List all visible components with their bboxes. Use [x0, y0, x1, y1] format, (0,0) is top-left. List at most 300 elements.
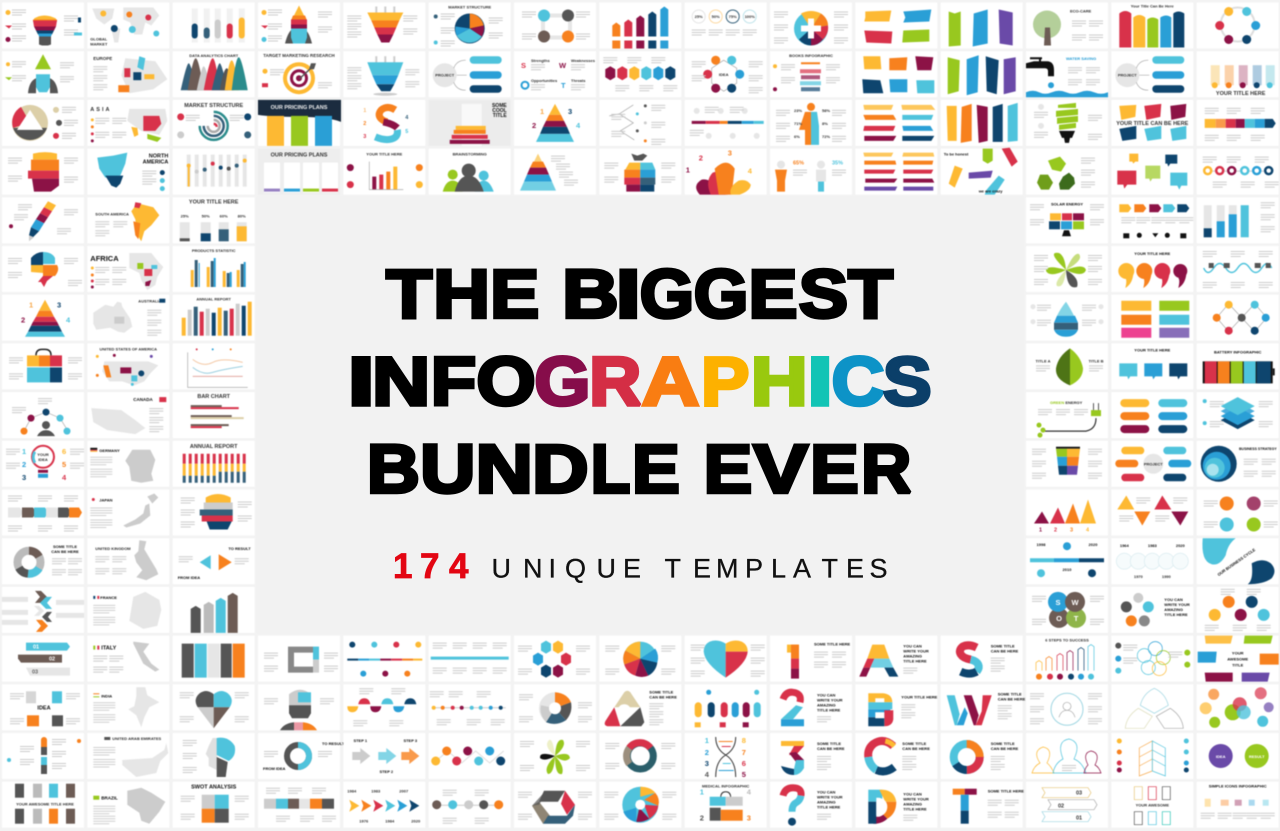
thumbnail: market structure pie	[429, 2, 511, 48]
thumbnail: letter C: CAN BE HERE	[902, 746, 930, 751]
thumbnail: people percentages: 35%	[832, 161, 843, 167]
thumbnail: battery infographic: BATTERY INFOGRAPHIC	[1214, 349, 1262, 354]
thumbnail: triangle arrow timeline: 1976	[359, 819, 369, 824]
thumbnail: cycle donut	[2, 538, 84, 584]
thumbnail: circular ring	[770, 2, 852, 48]
thumbnail: dollar sign: 4	[405, 115, 409, 121]
thumbnail: dollar sign	[343, 100, 425, 146]
thumbnail: gender split figure: 8%	[822, 121, 828, 126]
thumbnail: success bubbles	[1197, 684, 1279, 730]
thumbnail: donut from idea to result: TO RESULT	[322, 741, 345, 746]
thumbnail: gender split figure: 71%	[794, 121, 802, 126]
thumbnail: question mark: WRITE YOUR	[817, 795, 843, 800]
thumbnail: DNA helix: 1	[705, 736, 709, 745]
title: the biggest infographics bundle ever: E	[704, 430, 752, 508]
title: the biggest infographics bundle ever: T	[386, 256, 432, 332]
thumbnail: Brazil map: BRAZIL	[101, 796, 118, 801]
thumbnail: snake wave	[1197, 246, 1279, 292]
thumbnail: SWOT overlapping: O	[1056, 614, 1062, 623]
thumbnail: India map	[87, 684, 169, 730]
thumbnail: your idea bulb: 5	[62, 460, 66, 469]
thumbnail: global market map: GLOBAL	[90, 36, 108, 42]
thumbnail: pictogram columns: 80%	[238, 213, 246, 218]
thumbnail: letter O	[941, 733, 1023, 779]
thumbnail: gender split figure: 6%	[794, 134, 800, 139]
thumbnail: triangle peaks: 1	[1039, 528, 1042, 534]
thumbnail: medical infographic: MEDICAL INFOGRAPHIC	[702, 784, 749, 789]
thumbnail: five brushes	[941, 100, 1023, 146]
title: the biggest infographics bundle ever: G	[534, 343, 590, 420]
title: the biggest infographics bundle ever: E	[748, 256, 798, 332]
thumbnail: pictogram columns: 60%	[220, 213, 228, 218]
thumbnail: question mark: TITLE HERE	[817, 805, 841, 810]
thumbnail: puzzle square	[258, 636, 340, 682]
thumbnail: idea result blobs: IDEA	[1216, 754, 1226, 759]
thumbnail: letter T	[941, 782, 1024, 828]
thumbnail: SWOT circles	[514, 2, 596, 48]
title: the biggest infographics bundle ever: E	[632, 430, 680, 508]
thumbnail: cycle donut: CAN BE HERE	[51, 549, 79, 554]
thumbnail: business cycle: OUR BUSINESS CYCLE	[1216, 547, 1257, 577]
thumbnail: global market map	[87, 2, 169, 48]
title: the biggest infographics bundle ever: N	[476, 430, 533, 508]
thumbnail: puzzle heart	[173, 684, 255, 730]
thumbnail: triangle arrow timeline: 2020	[411, 819, 421, 824]
thumbnail: numeral 3	[770, 733, 852, 779]
thumbnail: outline ribbons: 01	[1076, 816, 1082, 822]
title: the biggest infographics bundle ever: R	[589, 343, 641, 420]
thumbnail: United Arab Emirates map: UNITED ARAB EMIRATES	[112, 736, 162, 741]
thumbnail: swot words: T	[561, 81, 566, 90]
thumbnail: triangle peaks: 3	[1070, 528, 1073, 534]
thumbnail: letter B	[855, 684, 938, 730]
thumbnail: rounded triangle	[599, 684, 681, 730]
thumbnail: tree: ECO-CARE	[1070, 8, 1092, 14]
thumbnail: people percentages	[770, 149, 852, 195]
thumbnail: France map: FRANCE	[100, 595, 117, 600]
thumbnail: ribbon list	[2, 636, 84, 682]
thumbnail: pricing plans light	[258, 149, 340, 195]
thumbnail: numbered pyramid: 2	[532, 121, 536, 130]
thumbnail: pictogram columns: 25%	[181, 213, 189, 218]
thumbnail: gender split figure: 58%	[822, 108, 830, 113]
thumbnail: Asia map: ASIA	[90, 107, 111, 113]
thumbnail: brainstorming: BRAINSTORMING	[453, 152, 487, 157]
thumbnail: simple icons infographic: SIMPLE ICONS INFOGRAPHIC	[1209, 784, 1267, 789]
thumbnail: your idea bulb: IDEA	[38, 457, 48, 462]
thumbnail: growth bars	[343, 149, 425, 195]
thumbnail: ribbons five	[855, 149, 937, 195]
thumbnail: DNA helix: 4	[705, 770, 710, 779]
thumbnail: question mark: YOU CAN	[817, 790, 836, 795]
thumbnail: medical infographic: 4	[747, 788, 752, 797]
thumbnail: dollar sign: 5	[405, 129, 408, 135]
thumbnail: Australia map: AUSTRALIA	[138, 299, 162, 304]
thumbnail: market structure radial	[173, 100, 255, 146]
thumbnail: outline ribbons: 03	[1076, 791, 1082, 797]
thumbnail: target marketing research: TARGET MARKETING RESEARCH	[263, 53, 335, 58]
thumbnail: your idea bulb	[2, 441, 84, 487]
thumbnail: awesome title tags	[2, 782, 84, 828]
thumbnail: United Kingdom map: UNITED KINGDOM	[95, 546, 131, 551]
thumbnail: years timeline: 1998	[1037, 542, 1046, 547]
thumbnail: zigzag circles	[429, 733, 511, 779]
thumbnail: hexagon ring with center text	[685, 51, 767, 97]
thumbnail: simple icons infographic	[1197, 782, 1279, 828]
title: the biggest infographics bundle ever: S	[883, 343, 932, 420]
thumbnail: pentagon blobs: YOU CAN	[1164, 597, 1183, 602]
thumbnail: step arrows: STEP 2	[379, 769, 394, 774]
thumbnail: letter O: SOME TITLE	[991, 741, 1015, 746]
thumbnail: to be honest brushes: we are crazy	[978, 189, 1003, 194]
thumbnail: brainstorming	[429, 149, 511, 195]
thumbnail: pill capsules	[685, 684, 767, 730]
thumbnail: Japan map: JAPAN	[99, 498, 113, 502]
title: the biggest infographics bundle ever: I	[616, 256, 641, 332]
thumbnail: hexagon ring with center text: IDEA	[719, 72, 729, 77]
title: the biggest infographics bundle ever: O	[476, 343, 536, 420]
thumbnail: pricing plans dark	[258, 100, 341, 146]
thumbnail: swot words: S	[521, 61, 526, 70]
thumbnail: tree	[1026, 2, 1108, 48]
thumbnail: donut from idea to result	[258, 733, 345, 779]
thumbnail: letter D: AMAZING	[903, 802, 922, 807]
thumbnail: years timeline: 2010	[1063, 567, 1072, 572]
thumbnail: step arrows	[343, 733, 425, 779]
thumbnail: energy bulb	[1026, 100, 1108, 146]
thumbnail: zigzag four	[1197, 587, 1279, 633]
thumbnail: swot words: Strengths	[531, 58, 550, 63]
thumbnail: outline ribbons: 02	[1058, 804, 1064, 810]
thumbnail: some cool title stairs	[429, 100, 511, 146]
thumbnail: your idea bulb: 4	[62, 473, 67, 482]
thumbnail: stacked layers	[1197, 392, 1279, 438]
thumbnail: Canada map: CANADA	[133, 397, 154, 402]
title: the biggest infographics bundle ever: G	[694, 256, 748, 332]
thumbnail: triangle peaks	[1026, 490, 1108, 536]
thumbnail: brush swatches six	[855, 51, 937, 97]
thumbnail: line chart	[173, 343, 255, 389]
thumbnail: SWOT overlapping	[1026, 587, 1108, 633]
thumbnail: Japan map	[87, 490, 169, 536]
thumbnail: numeral 3: CAN BE HERE	[817, 746, 845, 751]
thumbnail: triangle arrow timeline: 1984	[385, 819, 395, 824]
thumbnail: United States map	[87, 343, 169, 389]
thumbnail: products statistic bars: PRODUCTS STATISTIC	[192, 248, 236, 253]
thumbnail: swot words: Opportunities	[531, 78, 558, 83]
thumbnail: arrow chevrons	[2, 587, 84, 633]
title: the biggest infographics bundle ever: R	[861, 430, 911, 508]
thumbnail: gender split figure: 23%	[794, 108, 802, 113]
thumbnail: idea arrows	[2, 684, 84, 730]
thumbnail: trash recycling bin	[1026, 441, 1108, 487]
thumbnail: some cool title stairs: TITLE	[493, 113, 507, 119]
thumbnail: your idea bulb: 6	[62, 447, 66, 456]
title: the biggest infographics bundle ever: C	[832, 343, 884, 420]
thumbnail: outline tags	[1111, 782, 1193, 828]
thumbnail: project hub capsules	[1111, 441, 1193, 487]
thumbnail: water saving: WATER SAVING	[1066, 56, 1096, 61]
thumbnail: solar energy	[1026, 197, 1108, 243]
title: the biggest infographics bundle ever: G	[640, 256, 694, 332]
thumbnail: recycle arrows	[1026, 149, 1108, 195]
thumbnail: DNA helix: 8	[742, 736, 746, 745]
thumbnail: percentage rings: 50%	[712, 14, 720, 19]
thumbnail: arrows idea to result: TO RESULT	[228, 546, 251, 551]
thumbnail: brush boxes	[855, 2, 937, 48]
thumbnail: speech bubbles	[1111, 149, 1193, 195]
thumbnail: numbered pyramid two	[2, 295, 84, 341]
thumbnail: swot words: W	[559, 61, 567, 70]
thumbnail: ribbon brushes	[855, 100, 937, 146]
thumbnail: outline triangle	[1111, 684, 1193, 730]
thumbnail: books infographic: BOOKS INFOGRAPHIC	[789, 53, 833, 58]
thumbnail: pricing plans dark: OUR PRICING PLANS	[271, 105, 328, 111]
thumbnail: Africa map	[87, 246, 169, 292]
thumbnail: briefcase	[2, 343, 84, 389]
thumbnail: letter T: SOME TITLE HERE	[988, 789, 1024, 794]
thumbnail: head silhouette	[2, 149, 84, 195]
thumbnail: outline ring person	[1026, 684, 1108, 730]
subtitle: 174 unique templates: 174	[393, 547, 469, 586]
thumbnail: DNA helix	[685, 733, 767, 779]
thumbnail: idea arrows: IDEA	[37, 705, 51, 711]
thumbnail: project tabs repeat	[1111, 51, 1193, 97]
thumbnail: letter W: CAN BE HERE	[998, 696, 1026, 701]
thumbnail: capsule pairs	[1111, 392, 1193, 438]
thumbnail: profile head puzzle	[258, 684, 340, 730]
thumbnail: your idea bulb: 3	[22, 473, 26, 482]
thumbnail: pictogram columns	[173, 197, 255, 243]
thumbnail: outline people	[1026, 733, 1108, 779]
thumbnail: percentage rings: 75%	[729, 14, 737, 19]
thumbnail: idea result blobs	[1197, 733, 1279, 779]
thumbnail: awesome title tags: YOUR AWESOME TITLE HERE	[16, 802, 74, 807]
thumbnail: market structure radial: MARKET STRUCTURE	[184, 103, 244, 109]
thumbnail: medical infographic: 1	[700, 788, 704, 797]
thumbnail: letter A	[855, 636, 937, 682]
thumbnail: Europe map: EUROPE	[93, 56, 112, 61]
thumbnail: triangle arrow timeline	[343, 782, 425, 828]
thumbnail: petal fan: 2	[699, 154, 703, 163]
thumbnail: numbered pyramid: 4	[576, 121, 581, 130]
thumbnail: title between bubbles	[1111, 100, 1193, 146]
thumbnail: leaf: TITLE A	[1036, 358, 1051, 363]
thumbnail: gradient heart	[685, 636, 767, 682]
thumbnail: ribbon list: 03	[32, 670, 38, 676]
thumbnail: money bag	[599, 149, 681, 195]
thumbnail: step arrows: STEP 1	[353, 738, 368, 743]
title: the biggest infographics bundle ever: U	[420, 430, 476, 508]
title: the biggest infographics bundle ever: H	[751, 343, 808, 420]
thumbnail: DNA helix: 5	[742, 770, 746, 779]
thumbnail: petal fan: 1	[686, 166, 690, 175]
thumbnail: overlap circles timeline: 1970	[1134, 574, 1144, 579]
subtitle: 174 unique templates: UNIQUE TEMPLATES	[492, 554, 888, 584]
title: the biggest infographics bundle ever: V	[753, 430, 808, 508]
thumbnail: percentage rings: 25%	[695, 14, 703, 19]
title: the biggest infographics bundle ever: I	[807, 343, 833, 420]
thumbnail: numeral 2: TITLE HERE	[817, 707, 841, 712]
thumbnail: Africa map: AFRICA	[90, 254, 119, 263]
thumbnail: pentagon blobs: WRITE YOUR	[1164, 602, 1190, 607]
thumbnail: North America map	[87, 149, 169, 195]
thumbnail: horizontal bar chart: BAR CHART	[197, 394, 231, 400]
thumbnail: business cycle	[1197, 538, 1279, 584]
thumbnail: brush buttons	[1111, 295, 1193, 341]
thumbnail: DNA helix: 7	[742, 748, 746, 757]
thumbnail: donut from idea to result: FROM IDEA	[263, 766, 286, 771]
thumbnail: swirl circle	[599, 782, 681, 828]
thumbnail: cycle donut: SOME TITLE	[53, 544, 77, 549]
thumbnail: data analytics chart: DATA ANALYTICS CHART	[189, 53, 239, 58]
thumbnail: letter S	[941, 636, 1023, 682]
thumbnail: petal fan: 3	[728, 149, 732, 158]
thumbnail: products statistic bars	[173, 246, 255, 292]
thumbnail: numeral 2: YOU CAN	[817, 692, 836, 697]
thumbnail: dollar sign: 1	[363, 108, 366, 114]
thumbnail: quote marks: YOUR TITLE HERE	[1134, 251, 1171, 256]
thumbnail: United States map: UNITED STATES OF AMERICA	[100, 346, 157, 351]
thumbnail: blue funnel	[343, 51, 425, 97]
thumbnail: SWOT overlapping: T	[1074, 614, 1079, 623]
thumbnail: arrows idea to result	[173, 538, 255, 584]
thumbnail: rising arrows	[599, 2, 681, 48]
thumbnail: color band timeline	[685, 100, 767, 146]
title: the biggest infographics bundle ever: B	[367, 430, 420, 508]
thumbnail: target marketing research	[258, 51, 340, 97]
thumbnail: letter D: WRITE YOUR	[903, 797, 929, 802]
thumbnail: numbered tag columns	[173, 587, 255, 633]
thumbnail: to be honest brushes: To be honest	[944, 152, 969, 157]
thumbnail: title arch tabs	[1111, 2, 1193, 48]
thumbnail: letter C: SOME TITLE	[902, 741, 927, 746]
thumbnail: triangle arrow timeline: 2007	[399, 789, 409, 794]
thumbnail: medical infographic: 2	[700, 814, 704, 823]
thumbnail: hexagon twist	[514, 782, 596, 828]
thumbnail: rocket	[258, 2, 340, 48]
thumbnail: data analytics chart	[173, 51, 255, 97]
thumbnail: letter A: AMAZING	[903, 654, 922, 659]
title: the biggest infographics bundle ever: S	[799, 256, 848, 332]
thumbnail: swot words	[514, 51, 596, 97]
thumbnail: leaf: TITLE B	[1088, 358, 1104, 363]
subtitle: 174 unique templates	[393, 547, 888, 586]
thumbnail: leaf	[1026, 343, 1108, 389]
thumbnail: Germany map: GERMANY	[99, 448, 120, 453]
thumbnail: triangle peaks: 2	[1054, 528, 1057, 534]
thumbnail: triangle peaks: 4	[1086, 528, 1090, 534]
thumbnail: numbered pyramid	[514, 100, 596, 146]
thumbnail: global market map: MARKET	[90, 42, 108, 46]
thumbnail: water drop	[1026, 295, 1108, 341]
thumbnail: letter A: TITLE HERE	[903, 659, 927, 664]
thumbnail: growth bars: YOUR TITLE HERE	[366, 152, 403, 157]
thumbnail: North America map: NORTH	[149, 154, 168, 160]
thumbnail: swot words: Threats	[571, 78, 586, 83]
thumbnail: India map: INDIA	[101, 693, 112, 698]
thumbnail: letter D	[855, 782, 937, 828]
thumbnail: percentage rings	[685, 2, 767, 48]
thumbnail: years timeline	[1026, 538, 1108, 584]
thumbnail: numbered pyramid: 3	[568, 107, 572, 116]
thumbnail: numbered pyramid two: 2	[21, 316, 25, 325]
thumbnail: diamond network	[1197, 295, 1279, 341]
thumbnail: pie seven slices	[599, 636, 681, 682]
thumbnail: arrows idea to result: FROM IDEA	[178, 575, 200, 580]
title: the biggest infographics bundle ever: L	[591, 430, 630, 508]
thumbnail: awesome title brushes	[1197, 636, 1279, 682]
thumbnail: petal fan	[685, 149, 767, 195]
thumbnail: letter W: SOME TITLE	[998, 691, 1022, 696]
thumbnail: question mark: AMAZING	[817, 800, 836, 805]
thumbnail: letter C	[855, 733, 937, 779]
thumbnail: petal fan: 4	[748, 167, 753, 176]
thumbnail: SWOT analysis puzzle: SWOT ANALYSIS	[191, 785, 237, 791]
title: the biggest infographics bundle ever: E	[490, 256, 539, 332]
thumbnail: pentagon blobs	[1111, 587, 1193, 633]
thumbnail: letter O: CAN BE HERE	[991, 746, 1019, 751]
thumbnail: overlap circles timeline: 1990	[1162, 574, 1172, 579]
thumbnail: quote marks	[1111, 246, 1193, 292]
thumbnail: brain puzzle	[2, 246, 84, 292]
thumbnail: awesome title brushes: TITLE	[1232, 663, 1244, 668]
thumbnail: medical infographic: 3	[747, 814, 751, 823]
thumbnail: awesome title brushes: YOUR	[1232, 651, 1244, 656]
title: the biggest infographics bundle ever: B	[562, 256, 619, 332]
thumbnail: clover petals	[1026, 246, 1108, 292]
thumbnail: water saving	[1026, 51, 1108, 97]
thumbnail: pricing plans light: OUR PRICING PLANS	[271, 153, 328, 159]
thumbnail: Canada map	[87, 392, 169, 438]
thumbnail: France map	[87, 587, 169, 633]
thumbnail: horizontal bar chart	[173, 392, 255, 438]
thumbnail: dollar sign: 3	[363, 134, 366, 140]
thumbnail: idea result blobs: RESULT	[1249, 754, 1265, 759]
thumbnail: ribbon list: 02	[49, 657, 55, 663]
thumbnail: rounded triangle: CAN BE HERE	[649, 694, 677, 699]
thumbnail: funnel	[343, 2, 425, 48]
thumbnail: lollipop chart	[173, 149, 255, 195]
thumbnail: swot words: Weaknesses	[571, 58, 596, 63]
title: the biggest infographics bundle ever	[348, 256, 932, 508]
thumbnail: numeral 2: WRITE YOUR	[817, 697, 843, 702]
thumbnail: numeral 1: SOME TITLE HERE	[814, 642, 851, 647]
thumbnail: triangle arrow timeline: 1983	[371, 789, 381, 794]
thumbnail: letter W	[941, 684, 1026, 730]
thumbnail: letter B: YOUR TITLE HERE	[901, 694, 938, 699]
thumbnail: dollar sign: 2	[363, 121, 366, 127]
thumbnail: numeral 1	[770, 636, 852, 682]
thumbnail: puzzle strip	[258, 782, 340, 828]
thumbnail: question mark	[770, 782, 852, 828]
thumbnail: color timeline	[343, 636, 425, 682]
thumbnail: overlap circles timeline	[1111, 538, 1193, 584]
thumbnail: ribbon list: 01	[33, 645, 39, 651]
thumbnail: arrow band	[1197, 100, 1279, 146]
thumbnail: United Arab Emirates map	[87, 733, 169, 779]
thumbnail: letter S: SOME TITLE	[991, 644, 1015, 649]
title: the biggest infographics bundle ever: P	[701, 343, 749, 420]
thumbnail: Brazil map	[87, 782, 169, 828]
thumbnail: pictogram columns: 50%	[202, 213, 210, 218]
thumbnail: annual report stacked bars	[173, 441, 255, 487]
thumbnail: pie triangle	[2, 100, 84, 146]
thumbnail: triangle arrow timeline: 1984	[347, 789, 357, 794]
thumbnail: numeral 2	[770, 684, 852, 730]
thumbnail: six steps to success	[1026, 636, 1108, 682]
thumbnail: North America map: AMERICA	[143, 160, 168, 166]
